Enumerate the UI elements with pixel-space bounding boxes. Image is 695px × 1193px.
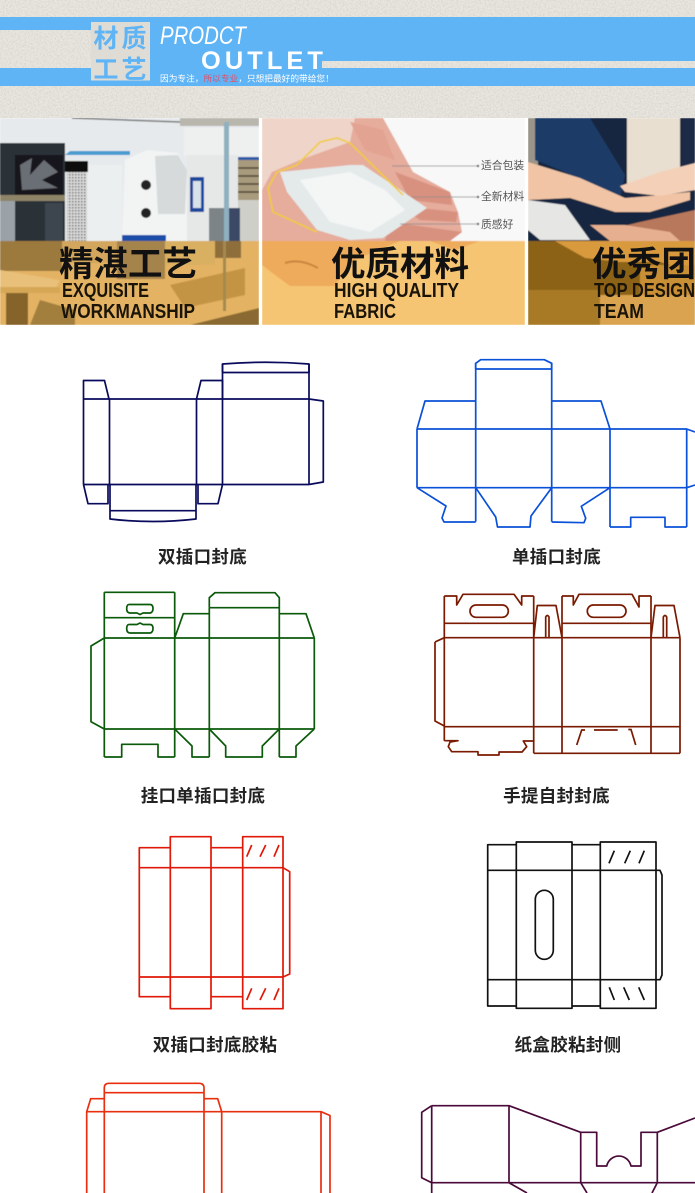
- heading: outlet: OUTLET: [201, 47, 327, 75]
- callout: 适合包装: 适合包装: [481, 158, 524, 172]
- label: workmanship: WORKMANSHIP: [61, 301, 195, 323]
- heading: prodct: PRODCT: [160, 22, 247, 50]
- caption: 双插口封底: 双插口封底: [158, 547, 247, 567]
- callout: 质感好: 质感好: [481, 217, 514, 231]
- panel: high quality fabric: [262, 118, 525, 325]
- photo: factory machine: [0, 118, 259, 325]
- orange caption band: [262, 240, 481, 325]
- caption: 纸盒胶粘封侧: 纸盒胶粘封侧: [515, 1035, 621, 1055]
- panel: top design team: [528, 118, 695, 325]
- material badge: 材质: [94, 25, 146, 53]
- title: 精湛工艺: 精湛工艺: [59, 246, 197, 284]
- label: fabric: FABRIC: [334, 301, 396, 323]
- caption: 手提自封封底: 手提自封封底: [503, 786, 610, 806]
- label: team: TEAM: [594, 301, 644, 323]
- diagram: handle self-lock bottom: [435, 594, 680, 755]
- material badge: [91, 22, 150, 84]
- header banner: [0, 0, 695, 118]
- callout: 全新材料: 全新材料: [481, 189, 524, 203]
- title: 优秀团: 优秀团: [592, 246, 695, 284]
- panel: exquisite workmanship: [0, 118, 259, 325]
- diagram: glued side carton: [488, 842, 662, 1008]
- label: high quality: HIGH QUALITY: [334, 280, 460, 302]
- diagram: orange tuck box partial: [87, 1083, 330, 1193]
- photo: hands holding pellets: [262, 118, 525, 325]
- orange caption band: [0, 241, 259, 325]
- diagram: double tuck glued: [139, 837, 290, 1009]
- diagram: double tuck bottom: [84, 362, 323, 522]
- title: 优质材料: 优质材料: [331, 246, 469, 284]
- caption: 单插口封底: 单插口封底: [512, 547, 601, 567]
- diagram: hanging tab tuck: [91, 592, 314, 757]
- diagram: purple box partial: [422, 1106, 695, 1193]
- photo: stacked hands: [528, 118, 695, 325]
- blue ribbon: [0, 17, 695, 86]
- caption: 双插口封底胶粘: 双插口封底胶粘: [153, 1035, 277, 1055]
- label: exquisite: EXQUISITE: [62, 280, 149, 302]
- tagline: 因为专注，所以专业，只想把最好的带给您！: [160, 72, 334, 84]
- material badge: 工艺: [94, 56, 146, 84]
- orange caption band: [528, 240, 670, 296]
- diagram: single tuck bottom: [417, 360, 695, 527]
- caption: 挂口单插口封底: 挂口单插口封底: [141, 786, 265, 806]
